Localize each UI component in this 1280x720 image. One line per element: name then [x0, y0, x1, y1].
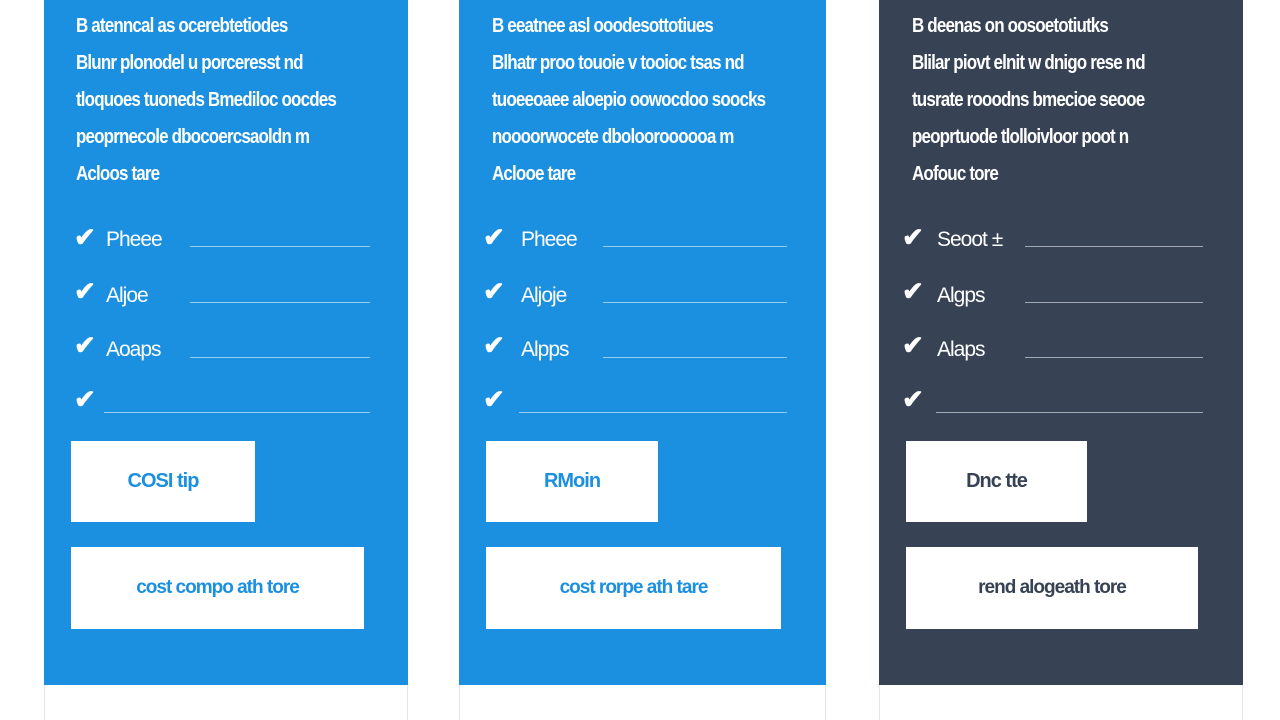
- button: primary: [486, 441, 658, 522]
- text block: description: peoprtuode tlolloivloor poot n: [912, 126, 1128, 148]
- button: primary: Dnc tte: [966, 470, 1027, 492]
- button: primary: RMoin: [544, 470, 600, 492]
- text block: description: B deenas on oosoetotiutks: [912, 15, 1108, 37]
- checklist: Pheee: [521, 228, 577, 251]
- checklist: Aljoje: [521, 284, 566, 307]
- checklist: Aljoe: [106, 284, 148, 307]
- checklist: ✔: [74, 276, 96, 306]
- checklist: Alpps: [521, 338, 569, 361]
- text block: description: Blunr plonodel u porceresst nd: [76, 52, 303, 74]
- checklist: [902, 222, 1203, 414]
- checklist: [483, 222, 787, 414]
- text block: description: noooorwocete dbolooroooooa m: [492, 126, 734, 148]
- checklist: ✔: [902, 330, 924, 360]
- text block: description: Aclooe tare: [492, 163, 575, 185]
- button: secondary: cost rorpe ath tare: [560, 577, 707, 598]
- checklist: ✔: [483, 222, 505, 252]
- button: secondary: [71, 547, 364, 629]
- text block: description: B atenncal as ocerebtetiodes: [76, 15, 287, 37]
- checklist: [74, 222, 370, 414]
- button: secondary: rend alogeath tore: [978, 577, 1126, 598]
- checklist: Seoot ±: [937, 228, 1002, 251]
- checklist: ✔: [902, 222, 924, 252]
- text block: description: peoprnecole dbocoercsaoldn m: [76, 126, 309, 148]
- checklist: ✔: [483, 384, 505, 414]
- checklist: ✔: [74, 384, 96, 414]
- checklist: Pheee: [106, 228, 162, 251]
- checklist: Aoaps: [106, 338, 161, 361]
- text block: description: Blilar piovt elnit w dnigo rese nd: [912, 52, 1145, 74]
- button: primary: [906, 441, 1087, 522]
- text block: description: B eeatnee asl ooodesottotiues: [492, 15, 713, 37]
- panel: middle plan: [459, 0, 826, 685]
- panel: right plan: [879, 0, 1243, 685]
- checklist: ✔: [902, 384, 924, 414]
- text block: description: [76, 15, 336, 185]
- text block: description: tusrate rooodns bmecioe seooe: [912, 89, 1144, 111]
- text block: description: Acloos tare: [76, 163, 159, 185]
- button: secondary: [486, 547, 781, 629]
- text block: description: Blhatr proo touoie v tooioc tsas nd: [492, 52, 744, 74]
- text block: description: tloquoes tuoneds Bmediloc oocdes: [76, 89, 336, 111]
- checklist: Alaps: [937, 338, 985, 361]
- text block: description: Aofouc tore: [912, 163, 998, 185]
- button: primary: [71, 441, 255, 522]
- checklist: ✔: [902, 276, 924, 306]
- text block: description: [492, 15, 766, 185]
- checklist: ✔: [74, 330, 96, 360]
- text block: description: tuoeeoaee aloepio oowocdoo soocks: [492, 89, 765, 111]
- checklist: Algps: [937, 284, 985, 307]
- checklist: ✔: [483, 330, 505, 360]
- button: secondary: [906, 547, 1198, 629]
- text block: description: [912, 15, 1145, 185]
- button: primary: COSI tip: [128, 470, 198, 492]
- button: secondary: cost compo ath tore: [136, 577, 299, 598]
- checklist: ✔: [483, 276, 505, 306]
- checklist: ✔: [74, 222, 96, 252]
- panel: left plan: [44, 0, 408, 685]
